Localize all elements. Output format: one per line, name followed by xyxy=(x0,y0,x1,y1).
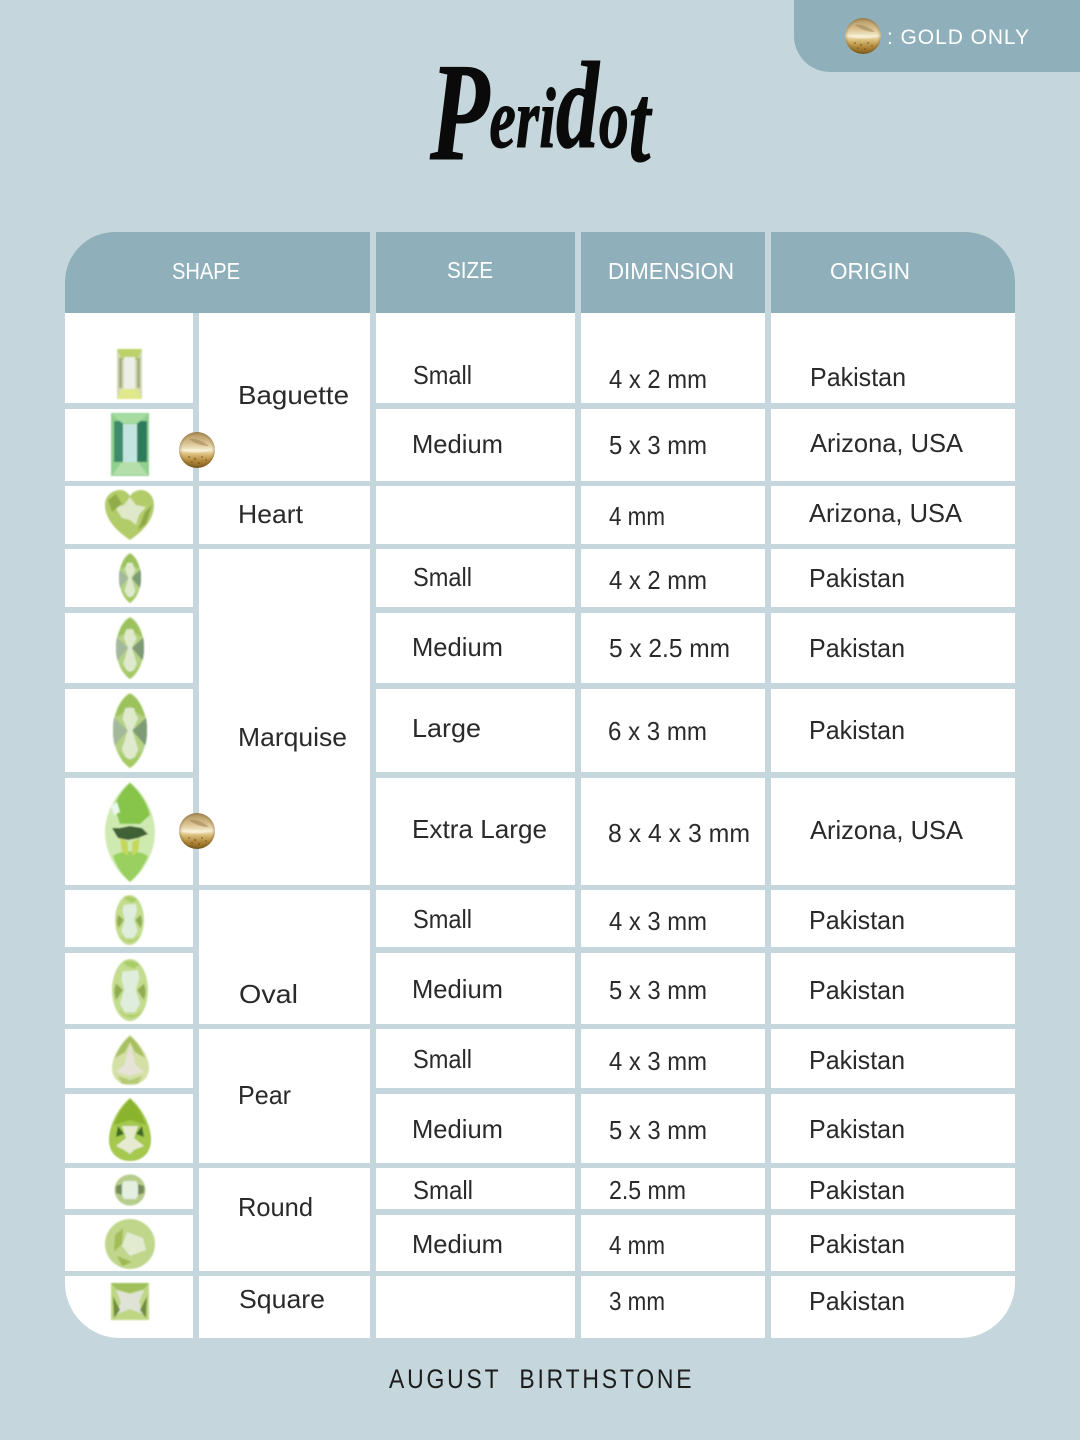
shape names: Oval xyxy=(239,979,298,1009)
icon: oval small gem xyxy=(115,895,144,945)
dimension column: 4 x 2 mm xyxy=(609,364,707,394)
origin column: Pakistan xyxy=(809,1286,905,1316)
dimension column: 2.5 mm xyxy=(609,1175,686,1205)
dimension column: 5 x 3 mm xyxy=(609,975,707,1005)
origin column: Pakistan xyxy=(810,362,906,392)
dimension column: 5 x 2.5 mm xyxy=(609,633,730,663)
dimension column: 5 x 3 mm xyxy=(609,430,707,460)
title: do xyxy=(556,38,629,175)
size column: Medium xyxy=(412,1114,503,1144)
shape names: Baguette xyxy=(238,380,349,410)
table header band xyxy=(65,232,1015,313)
icon: marquise medium gem xyxy=(116,617,144,679)
icon: marquise small gem xyxy=(119,553,141,603)
dimension column: 5 x 3 mm xyxy=(609,1115,707,1145)
size column: Medium xyxy=(412,974,503,1004)
legend: gold only xyxy=(794,0,1080,72)
size column: Medium xyxy=(412,632,503,662)
origin column xyxy=(809,362,964,1316)
title: eri xyxy=(489,72,556,167)
size column: Small xyxy=(413,562,472,592)
icon: baguette medium gem xyxy=(111,413,149,476)
origin column: Arizona, USA xyxy=(810,428,964,458)
size column: Small xyxy=(413,1175,473,1205)
size column: Small xyxy=(413,1044,472,1074)
dimension column xyxy=(608,364,750,1316)
dimension column: 4 mm xyxy=(609,1230,665,1260)
icon: round small gem xyxy=(114,1174,146,1206)
icon: oval medium gem xyxy=(112,959,148,1021)
origin column: Pakistan xyxy=(809,715,905,745)
origin column: Pakistan xyxy=(809,633,905,663)
icon: pear small gem xyxy=(112,1035,149,1085)
column headings xyxy=(172,257,910,284)
origin column: Arizona, USA xyxy=(810,815,964,845)
dimension column: 4 x 3 mm xyxy=(609,906,707,936)
column headings: ORIGIN xyxy=(830,258,910,284)
size column: Large xyxy=(412,713,481,743)
table xyxy=(65,232,1015,1338)
icon: baguette small gem xyxy=(117,349,142,399)
title xyxy=(429,36,653,190)
size column: Medium xyxy=(412,1229,503,1259)
dimension column: 4 x 2 mm xyxy=(609,565,707,595)
shape names xyxy=(238,380,349,1314)
icon: marquise extra large gem xyxy=(105,782,155,882)
title: t xyxy=(629,61,653,185)
legend: gold only: : GOLD ONLY xyxy=(887,26,1029,49)
icon: gold marker baguette xyxy=(179,432,215,468)
icon: marquise large gem xyxy=(113,693,147,768)
table body xyxy=(65,313,1015,1338)
icon: pear medium gem xyxy=(109,1098,151,1161)
title: P xyxy=(429,36,491,190)
origin column: Pakistan xyxy=(809,1175,905,1205)
origin column: Pakistan xyxy=(809,1045,905,1075)
dimension column: 6 x 3 mm xyxy=(608,716,707,746)
shape names: Heart xyxy=(238,499,304,529)
column headings: SIZE xyxy=(447,257,493,283)
origin column: Pakistan xyxy=(809,563,905,593)
dimension column: 4 mm xyxy=(609,501,665,531)
size column: Small xyxy=(413,360,472,390)
shape names: Round xyxy=(238,1192,313,1222)
origin column: Pakistan xyxy=(809,1229,905,1259)
column headings: SHAPE xyxy=(172,258,240,284)
icon: gold marker marquise xyxy=(179,813,215,849)
origin column: Arizona, USA xyxy=(809,498,963,528)
size column: Extra Large xyxy=(412,814,547,844)
dimension column: 4 x 3 mm xyxy=(609,1046,707,1076)
icon: heart gem xyxy=(105,490,154,540)
origin column: Pakistan xyxy=(809,1114,905,1144)
column headings: DIMENSION xyxy=(608,258,734,284)
dimension column: 8 x 4 x 3 mm xyxy=(608,818,750,848)
shape names: Marquise xyxy=(238,722,347,752)
size column xyxy=(412,360,547,1259)
icon: round medium gem xyxy=(105,1219,155,1269)
shape names: Pear xyxy=(238,1080,291,1110)
origin column: Pakistan xyxy=(809,975,905,1005)
icon: square gem xyxy=(111,1283,149,1320)
dimension column: 3 mm xyxy=(609,1286,665,1316)
size column: Medium xyxy=(412,429,503,459)
size column: Small xyxy=(413,904,472,934)
footer caption: AUGUST BIRTHSTONE xyxy=(389,1364,692,1394)
shape names: Square xyxy=(239,1284,325,1314)
origin column: Pakistan xyxy=(809,905,905,935)
